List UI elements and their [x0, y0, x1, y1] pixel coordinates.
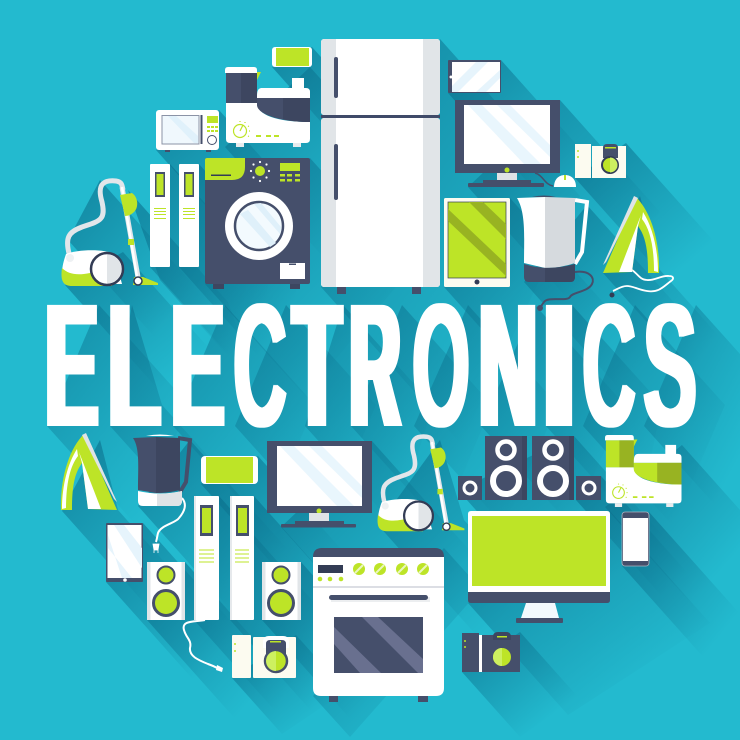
- washing machine: [205, 158, 310, 289]
- microwave: [156, 110, 219, 152]
- title: R: [350, 268, 400, 464]
- dark camera: [462, 632, 520, 672]
- camera, cream: [232, 635, 296, 678]
- title: C: [582, 267, 636, 464]
- clothes iron, right: [603, 196, 673, 298]
- title: S: [643, 268, 697, 465]
- clothes iron, left: [61, 433, 117, 510]
- desktop monitor, lower: [267, 441, 372, 528]
- title: L: [108, 269, 161, 464]
- green phone, top: [272, 47, 312, 67]
- title: I: [540, 267, 578, 464]
- large green monitor: [468, 511, 610, 623]
- food processor, lower: [605, 435, 682, 507]
- long shadows of title letters: [47, 305, 740, 526]
- bookshelf speaker, left: [147, 562, 185, 620]
- title: T: [293, 266, 341, 463]
- bookshelf speaker, right: [262, 562, 301, 620]
- tower fans / speakers, top: [150, 164, 199, 267]
- vacuum cleaner, left: [61, 181, 158, 286]
- tower fans / speakers, lower: [184, 496, 254, 672]
- refrigerator: [321, 39, 440, 294]
- horizontal tablet, top: [448, 60, 501, 93]
- stereo speaker system: [458, 436, 601, 500]
- oven stove: [313, 548, 444, 702]
- green phone, lower: [201, 456, 258, 484]
- smartphone: [622, 512, 649, 566]
- computer mouse: [554, 175, 576, 187]
- title: N: [479, 268, 537, 465]
- green tablet, vertical: [444, 198, 510, 287]
- white kettle: [517, 196, 593, 311]
- title: [45, 266, 697, 465]
- dark kettle: [133, 434, 190, 553]
- title: O: [412, 267, 470, 464]
- vacuum cleaner, lower: [378, 437, 464, 531]
- food processor: [225, 67, 310, 147]
- camera, top right: [575, 144, 626, 178]
- title: C: [233, 267, 287, 464]
- title: E: [171, 266, 224, 463]
- vertical tablet, lower: [106, 523, 143, 582]
- desktop monitor, top: [455, 100, 560, 187]
- title: E: [45, 266, 98, 463]
